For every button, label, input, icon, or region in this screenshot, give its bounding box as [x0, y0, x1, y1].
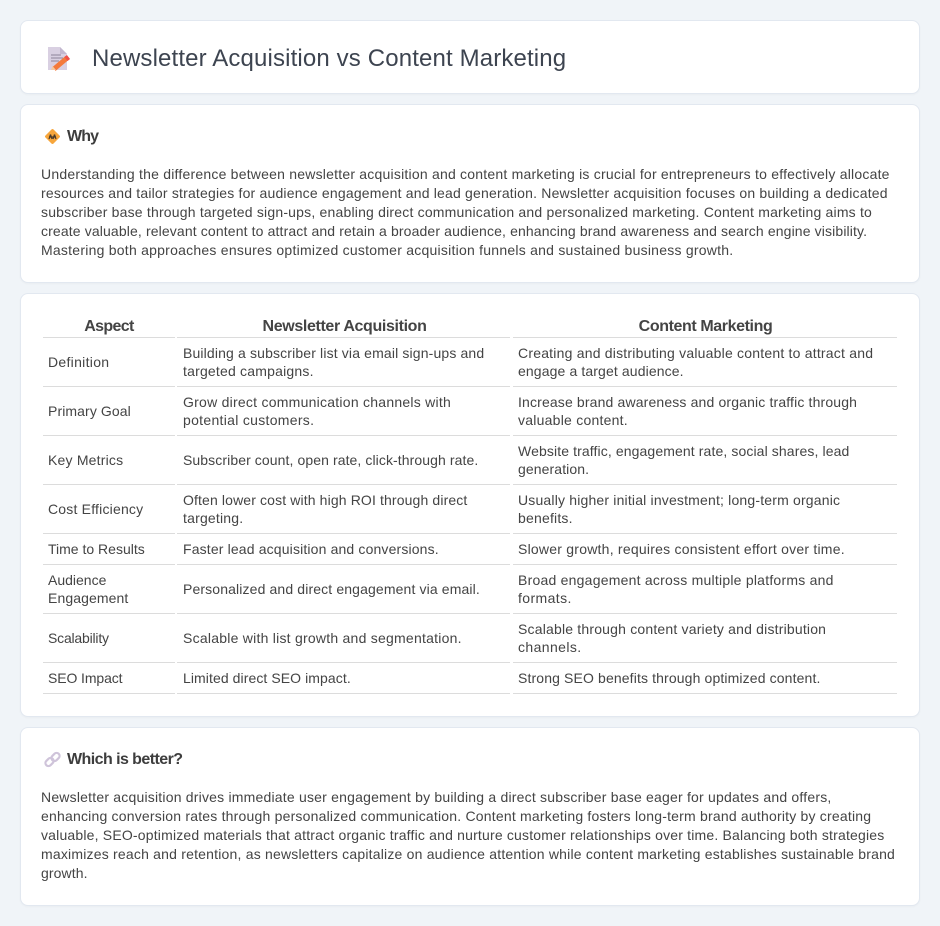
text block: why: Mastering both approaches ensures optimized customer acquisition funnels and sustained business growth. — [41, 242, 733, 258]
table header: Newsletter Acquisition — [263, 318, 426, 335]
text block: which is better: enhancing conversion rates through personalized communication. Content marketing fosters long-term brand authority by creating — [41, 808, 871, 824]
row: scalability — [48, 621, 826, 655]
row: key metrics: Website traffic, engagement rate, social shares, lead — [518, 443, 849, 459]
panel: header — [20, 20, 920, 94]
row: definition: Building a subscriber list via email sign-ups and — [183, 345, 484, 361]
row: time to results — [48, 541, 845, 557]
row: scalability: Scalability — [48, 630, 109, 646]
row: cost efficiency: Often lower cost with high ROI through direct — [183, 492, 467, 508]
row: audience engagement: Engagement — [48, 590, 128, 606]
row: definition: Definition — [48, 354, 109, 370]
heading: why: Why — [67, 128, 98, 145]
row: audience engagement: Audience — [48, 572, 106, 588]
row: primary goal: potential customers. — [183, 412, 314, 428]
row: key metrics: Key Metrics — [48, 452, 123, 468]
text block: why: Understanding the difference between newsletter acquisition and content marketing is crucial for entrepreneurs to effectively allocate — [41, 166, 890, 182]
row: audience engagement — [48, 572, 834, 606]
text block: which is better: growth. — [41, 865, 88, 881]
row: definition: Creating and distributing valuable content to attract and — [518, 345, 873, 361]
table header: Aspect — [84, 318, 134, 335]
row: primary goal: valuable content. — [518, 412, 628, 428]
table header — [84, 318, 772, 335]
row: seo impact: Limited direct SEO impact. — [183, 670, 351, 686]
row: seo impact: SEO Impact — [48, 670, 122, 686]
icon: construction diamond — [45, 129, 60, 144]
title: Newsletter Acquisition vs Content Marketing — [92, 45, 566, 72]
heading: which is better: Which is better? — [67, 751, 182, 768]
row: time to results: Faster lead acquisition and conversions. — [183, 541, 439, 557]
row: time to results: Slower growth, requires consistent effort over time. — [518, 541, 845, 557]
text block: why: create valuable, relevant content to attract and retain a broader audience, enhancing brand awareness and search engine visibility. — [41, 223, 867, 239]
text block: which is better: maximizes reach and retention, as newsletters capitalize on audience attention while content marketing establishes sustainable brand — [41, 846, 895, 862]
panel: which is better — [20, 727, 920, 906]
text block: which is better — [41, 789, 895, 881]
row: primary goal: Grow direct communication channels with — [183, 394, 451, 410]
panel: comparison table — [20, 293, 920, 717]
row: key metrics: Subscriber count, open rate, click-through rate. — [183, 452, 478, 468]
text block: why: subscriber base through targeted sign-ups, enabling direct communication and personalized marketing. Content marketing aims to — [41, 204, 872, 220]
row: cost efficiency: targeting. — [183, 510, 243, 526]
row: time to results: Time to Results — [48, 541, 145, 557]
row: primary goal: Increase brand awareness and organic traffic through — [518, 394, 857, 410]
row: audience engagement: Broad engagement across multiple platforms and — [518, 572, 834, 588]
panel: why — [20, 104, 920, 283]
row: definition — [48, 345, 873, 379]
row: seo impact: Strong SEO benefits through optimized content. — [518, 670, 820, 686]
row: scalability: channels. — [518, 639, 582, 655]
icon: link — [44, 752, 61, 768]
row: key metrics — [48, 443, 849, 477]
text block: why: resources and tailor strategies for audience engagement and lead generation. Newsletter acquisition focuses on building a dedicated — [41, 185, 888, 201]
row: audience engagement: formats. — [518, 590, 572, 606]
row: cost efficiency: Cost Efficiency — [48, 501, 143, 517]
row: cost efficiency: Usually higher initial investment; long-term organic — [518, 492, 840, 508]
row: scalability: Scalable with list growth and segmentation. — [183, 630, 462, 646]
text block: which is better: Newsletter acquisition drives immediate user engagement by building a direct subscriber base eager for updates and offers, — [41, 789, 832, 805]
row: cost efficiency — [48, 492, 840, 526]
row: cost efficiency: benefits. — [518, 510, 573, 526]
text block: why — [41, 166, 890, 258]
icon: memo with pencil — [48, 47, 70, 71]
table header: Content Marketing — [639, 318, 772, 335]
row: scalability: Scalable through content variety and distribution — [518, 621, 826, 637]
row: audience engagement: Personalized and direct engagement via email. — [183, 581, 480, 597]
text block: which is better: valuable, SEO-optimized materials that attract organic traffic and nurture customer relationships over time. Balancing both strategies — [41, 827, 884, 843]
row: primary goal — [48, 394, 857, 428]
row: definition: engage a target audience. — [518, 363, 684, 379]
row: seo impact — [48, 670, 820, 686]
row: primary goal: Primary Goal — [48, 403, 131, 419]
row: key metrics: generation. — [518, 461, 589, 477]
row: definition: targeted campaigns. — [183, 363, 314, 379]
